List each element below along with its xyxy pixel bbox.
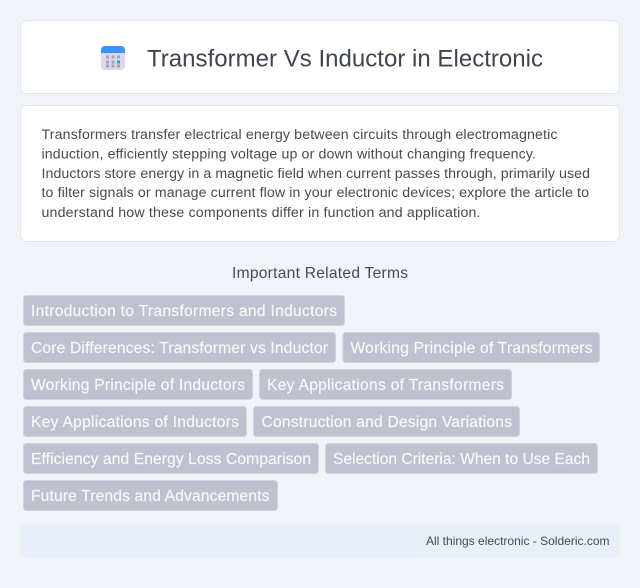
icon: calendar grid xyxy=(101,46,125,70)
footer text: All things electronic - Solderic.com xyxy=(426,534,610,548)
heading: related terms: Important Related Terms xyxy=(232,265,408,282)
title: Transformer Vs Inductor in Electronic xyxy=(147,46,543,72)
panel: header xyxy=(20,20,620,94)
tag: Introduction to Transformers and Inductors xyxy=(31,303,337,320)
tag: Core Differences: Transformer vs Inductor xyxy=(31,340,328,357)
tag: Construction and Design Variations xyxy=(262,414,512,431)
tag xyxy=(343,332,600,362)
description text: to filter signals or manage current flow in your electronic devices; explore the article to xyxy=(42,185,589,201)
tag xyxy=(24,332,336,362)
footer xyxy=(20,524,620,558)
tag xyxy=(24,480,278,510)
tag xyxy=(24,296,344,326)
tag: Key Applications of Inductors xyxy=(31,414,239,431)
tag: Future Trends and Advancements xyxy=(31,488,270,505)
tag xyxy=(24,370,252,400)
tag: Working Principle of Inductors xyxy=(31,377,245,394)
description text: understand how these components differ in function and application. xyxy=(42,205,480,221)
tag xyxy=(326,444,598,474)
tag group: related terms xyxy=(24,296,600,510)
tag: Key Applications of Transformers xyxy=(267,377,504,394)
description text: induction, efficiently stepping voltage up or down without changing frequency. xyxy=(42,146,536,162)
tag xyxy=(24,444,318,474)
description text xyxy=(42,127,590,221)
tag xyxy=(260,370,512,400)
description text: Transformers transfer electrical energy between circuits through electromagnetic xyxy=(42,127,558,143)
tag xyxy=(254,406,520,436)
tag: Selection Criteria: When to Use Each xyxy=(333,451,590,468)
tag xyxy=(24,406,246,436)
tag: Efficiency and Energy Loss Comparison xyxy=(31,451,311,468)
panel: description xyxy=(20,106,620,242)
tag: Working Principle of Transformers xyxy=(350,340,593,357)
description text: Inductors store energy in a magnetic field when current passes through, primarily used xyxy=(42,166,590,182)
